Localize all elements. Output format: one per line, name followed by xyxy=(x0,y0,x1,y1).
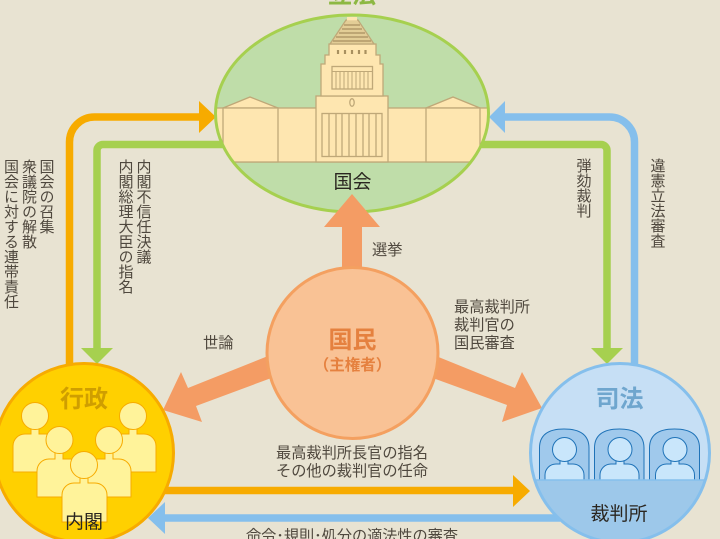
label: Diet: 国会 xyxy=(333,171,372,193)
heading: people: 国民 xyxy=(328,327,376,354)
text: appointment of judges: その他の裁判官の任命 xyxy=(276,463,428,480)
text: judicial review: 違憲立法審査 xyxy=(648,158,666,248)
arrow: people to Diet xyxy=(324,194,380,272)
text: appointment of judges: 最高裁判所長官の指名 xyxy=(276,445,428,462)
text: review of justices: 国民審査 xyxy=(454,335,515,352)
panel: Diet xyxy=(200,15,504,212)
text: appointment of judges xyxy=(276,445,428,480)
arrow: orange, cabinet to courts xyxy=(165,475,530,507)
text: review of justices xyxy=(454,299,530,352)
arrow: people to courts xyxy=(430,356,542,422)
icon: Diet building xyxy=(217,17,487,163)
arrow: blue, courts to cabinet xyxy=(148,502,560,534)
label: sovereign: （主権者） xyxy=(314,355,391,374)
text: joint responsibility: 国会に対する連帯責任 xyxy=(2,159,19,309)
text: dissolve the House: 衆議院の解散 xyxy=(20,159,37,249)
text: review of justices: 裁判官の xyxy=(454,317,515,334)
heading: executive: 行政 xyxy=(60,386,108,413)
panel: judiciary xyxy=(525,364,715,539)
arrow: green, Diet to courts xyxy=(478,144,623,364)
text: designate prime minister: 内閣総理大臣の指名 xyxy=(116,159,134,294)
text: summon the Diet: 国会の召集 xyxy=(38,159,54,234)
icon: cabinet members xyxy=(13,402,156,522)
heading: judiciary: 司法 xyxy=(596,386,644,413)
text: review of justices: 最高裁判所 xyxy=(454,299,530,316)
label: court: 裁判所 xyxy=(590,503,648,525)
panel: executive xyxy=(0,364,174,539)
arrow: people to cabinet xyxy=(163,356,274,422)
text: impeachment trial: 弾劾裁判 xyxy=(574,158,592,218)
arrow: blue, courts to Diet xyxy=(489,101,634,368)
panel: people xyxy=(267,268,438,438)
label: cabinet: 内閣 xyxy=(65,511,103,533)
icon: judges xyxy=(540,429,700,480)
arrow: orange, cabinet to Diet xyxy=(70,101,216,368)
label: public opinion: 世論 xyxy=(203,335,233,352)
arrow: green, Diet to cabinet xyxy=(81,144,226,364)
label: election: 選挙 xyxy=(372,242,402,259)
text: no-confidence resolution: 内閣不信任決議 xyxy=(134,159,152,264)
